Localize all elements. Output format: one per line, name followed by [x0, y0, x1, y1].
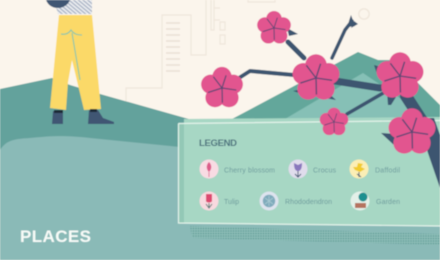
city outline: [126, 0, 369, 110]
legend item: rhododendron: Rhododendron: [285, 199, 332, 206]
legend item: cherry blossom: [200, 160, 275, 178]
legend item: rhododendron: [260, 192, 332, 210]
legend item: crocus: Crocus: [313, 168, 336, 174]
foreground hill: [0, 78, 220, 160]
branch buds and leaves: [287, 15, 396, 146]
legend item: daffodil: Daffodil: [375, 168, 400, 174]
mountains: [232, 52, 440, 130]
legend item: tulip: Tulip: [224, 199, 239, 206]
legend item: garden: [350, 192, 400, 210]
legend title: LEGEND: [199, 138, 237, 149]
legend item: cherry blossom: Cherry blossom: [224, 168, 275, 174]
cherry branches: [239, 21, 428, 130]
lower branch trunk: [418, 118, 440, 188]
panel shadow texture: [190, 226, 440, 245]
legend panel: [178, 117, 440, 226]
legend item: daffodil: [350, 160, 400, 178]
person: shoes: [52, 109, 114, 124]
legend item: garden: Garden: [376, 199, 400, 206]
cherry blossoms: [201, 11, 435, 154]
legend item: crocus: [288, 160, 336, 178]
person: trousers: [50, 15, 101, 110]
ground: [0, 136, 440, 260]
person: shirt: [54, 0, 92, 14]
section title: PLACES: [20, 227, 91, 246]
person: head or bag: [46, 0, 70, 8]
legend item: tulip: [200, 192, 239, 210]
